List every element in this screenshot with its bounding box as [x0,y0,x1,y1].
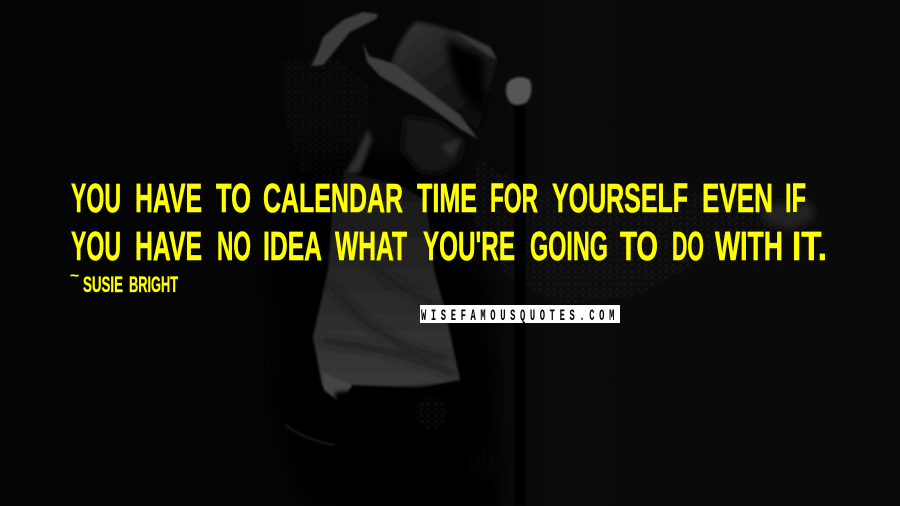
quote line 2: NO [217,223,251,269]
quote line 1: FOR [490,175,538,221]
jacket sequins left shoulder [282,55,372,190]
hand at end of sleeve [760,202,814,230]
quote line 2: HAVE [135,223,202,269]
hat crown right highlight [452,30,497,60]
shirt folds [320,225,458,376]
photo: performer with hat and microphone [245,12,814,506]
trousers [335,384,500,506]
ornament two [469,450,499,480]
attribution: ~ [70,267,79,283]
hat shadow [446,38,485,115]
quote line 2: YOU [71,223,121,269]
logo: wisefamousquotes.com: WISEFAMOUSQUOTES.COM [421,306,619,325]
attribution: BRIGHT [129,272,178,297]
microphone stand [514,104,526,506]
quote line 1: YOU [71,175,121,221]
ornament one [415,397,447,429]
quote text [71,175,827,269]
quote line 2: IDEA [263,223,322,269]
quote line 2: DO [672,223,704,269]
hat crown [392,22,497,130]
quote line 1: CALENDAR [263,175,403,221]
raised arm and hand [311,12,378,66]
microphone head [506,77,531,105]
quote line 2: IT. [792,223,827,269]
quote line 1: YOURSELF [552,175,688,221]
coat tail curve [285,425,335,445]
quote line 1: HAVE [135,175,202,221]
quote line 1 [71,175,806,221]
collar highlight [344,128,372,176]
jacket sequins right sleeve [470,158,790,305]
eye and cheek highlight [440,138,462,158]
hat brim [363,43,478,139]
quote line 1: EVEN [702,175,773,221]
quote line 1: IF [785,175,806,221]
attribution: SUSIE [83,272,123,297]
shirt hem highlight [322,372,352,402]
quote line 2: WITH [715,223,783,269]
quote line 1: TO [216,175,251,221]
attribution [70,267,178,297]
quote line 2: WHAT [335,223,407,269]
quote line 2: YOU'RE [423,223,515,269]
quote line 2: GOING [530,223,608,269]
shirt [313,172,460,402]
quote line 2 [71,223,827,269]
quote line 1: TIME [417,175,477,221]
face [402,116,464,174]
jacket body [265,150,500,506]
jacket sequins lower left [245,300,320,395]
quote line 2: TO [620,223,658,269]
